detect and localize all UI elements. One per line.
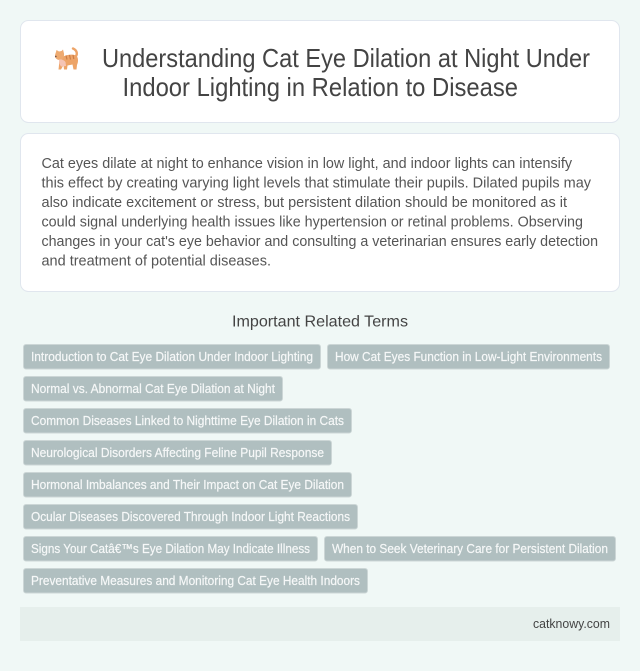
icon: cat (55, 48, 78, 70)
tag: Signs Your Catâ€™s Eye Dilation May Indicate Illness (31, 541, 310, 556)
title: Indoor Lighting in Relation to Disease (122, 72, 518, 102)
tag (24, 376, 282, 401)
title: Understanding Cat Eye Dilation at Night Under (102, 43, 590, 73)
tag (24, 536, 318, 561)
text block: description: this effect by creating varying light levels that stimulate their pupils. Dilated pupils may (42, 176, 592, 192)
tag (24, 472, 352, 497)
tag (328, 344, 610, 369)
tag: Ocular Diseases Discovered Through Indoor Light Reactions (31, 509, 350, 524)
tag (324, 536, 616, 561)
text block: description: and treatment of potential diseases. (42, 254, 271, 270)
tag: When to Seek Veterinary Care for Persistent Dilation (332, 541, 608, 556)
heading: important related terms: Important Related Terms (232, 314, 408, 330)
text block: description: changes in your cat's eye behavior and consulting a veterinarian ensures early detection (42, 234, 598, 250)
tag: Hormonal Imbalances and Their Impact on Cat Eye Dilation (31, 477, 344, 492)
footer: catknowy.com (533, 616, 610, 631)
panel: header (20, 20, 620, 122)
title (102, 43, 590, 102)
tag (24, 408, 352, 433)
tag (24, 568, 368, 593)
text block: description: Cat eyes dilate at night to enhance vision in low light, and indoor lights can intensify (42, 156, 573, 172)
tag: Introduction to Cat Eye Dilation Under Indoor Lighting (31, 349, 313, 364)
footer (20, 607, 620, 641)
tag: Normal vs. Abnormal Cat Eye Dilation at Night (31, 381, 275, 396)
text block: description (42, 156, 598, 270)
tag: Neurological Disorders Affecting Feline Pupil Response (31, 445, 324, 460)
tag: How Cat Eyes Function in Low-Light Environments (335, 349, 602, 364)
text block: description: also indicate excitement or stress, but persistent dilation should be monitored as it (42, 195, 567, 211)
tag group: related terms (24, 344, 616, 593)
tag: Common Diseases Linked to Nighttime Eye Dilation in Cats (31, 413, 344, 428)
panel: description (20, 134, 620, 292)
tag (24, 504, 358, 529)
tag (24, 344, 320, 369)
tag: Preventative Measures and Monitoring Cat Eye Health Indoors (31, 573, 360, 588)
tag (24, 440, 332, 465)
text block: description: could signal underlying health issues like hypertension or retinal problems. Observing (42, 214, 583, 230)
